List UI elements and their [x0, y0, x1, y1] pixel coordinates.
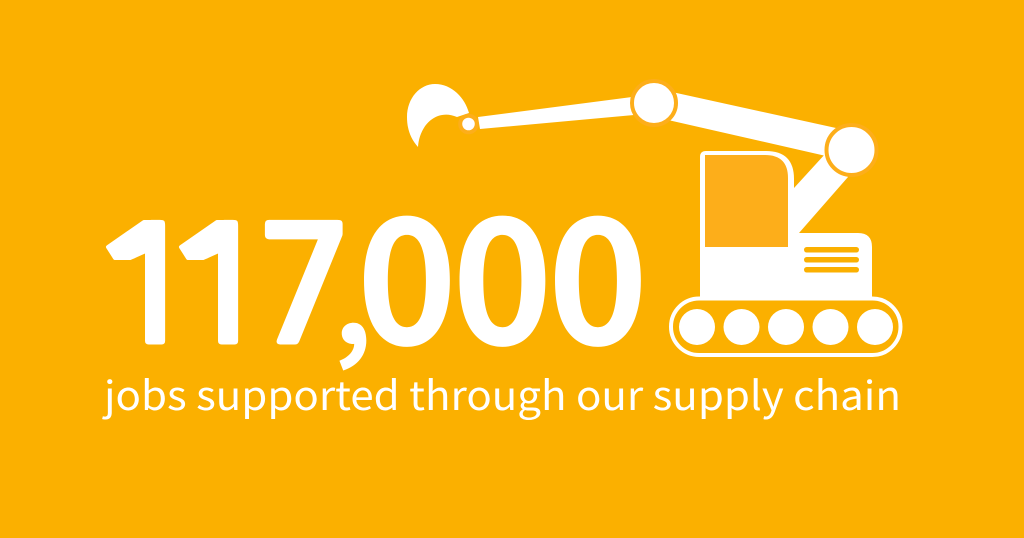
excavator bucket [407, 84, 469, 147]
headline number [103, 148, 648, 394]
cab window [705, 155, 788, 247]
excavator strut [794, 153, 848, 233]
track wheels [679, 309, 893, 345]
excavator body [700, 151, 872, 300]
headline number: 117 [103, 208, 353, 366]
engine vents [804, 247, 859, 272]
subtitle: jobs supported through our supply chain [102, 364, 901, 422]
joint: bucket pivot [460, 116, 477, 132]
headline number: 000 [356, 148, 648, 394]
headline number: , [333, 204, 373, 380]
caterpillar track [671, 298, 900, 355]
joint: arm elbow [632, 81, 676, 125]
excavator forearm [478, 97, 634, 129]
icon: excavator [407, 81, 900, 355]
excavator upper arm [668, 92, 836, 156]
joint: arm shoulder [826, 125, 876, 175]
